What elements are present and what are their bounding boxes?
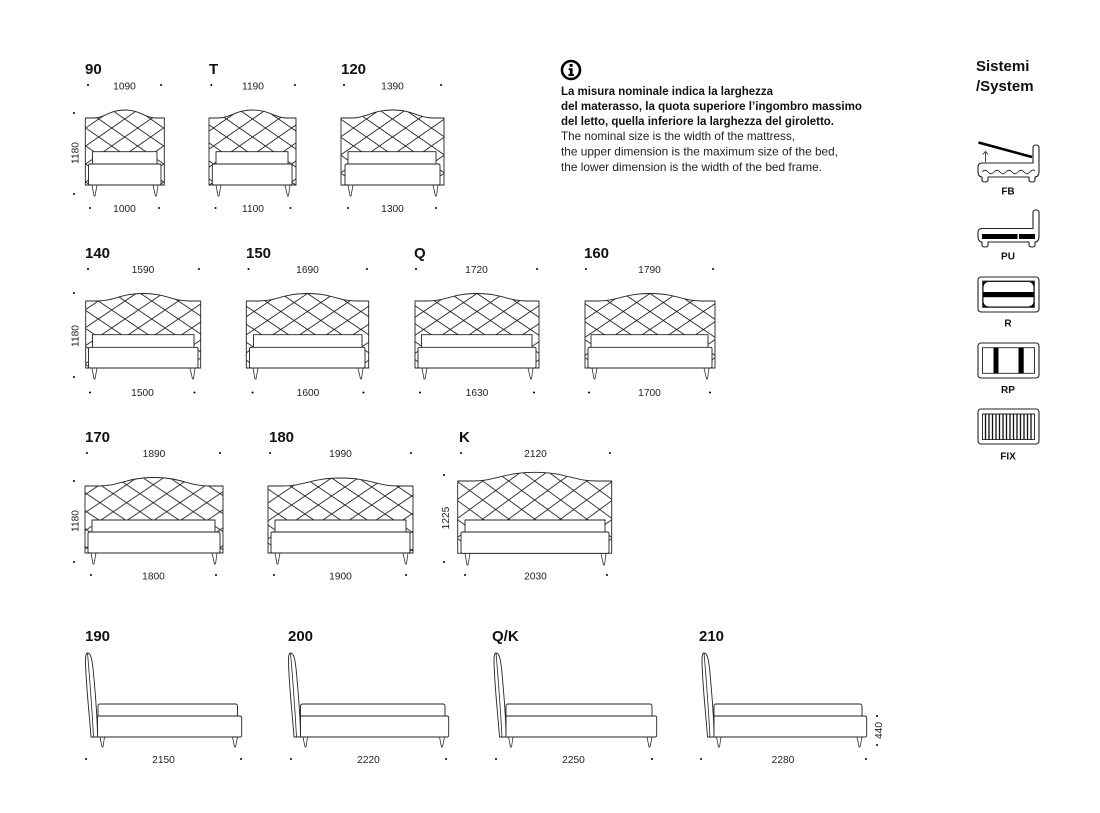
heading: 190: 190	[85, 628, 110, 645]
English note text: the lower dimension is the width of the bed frame.	[561, 160, 822, 174]
lower dimension 1300	[347, 204, 437, 215]
upper dimension 2120: 2120	[524, 449, 547, 460]
lower dimension 1600: 1600	[297, 388, 320, 399]
upper dimension 1890: 1890	[143, 449, 166, 460]
label FB: FB	[1001, 186, 1015, 198]
size 180 front view	[268, 429, 413, 582]
lower dimension 2220: 2220	[357, 755, 380, 766]
upper dimension 1720: 1720	[465, 265, 488, 276]
icon: info	[562, 61, 580, 79]
heading: 210: 210	[699, 628, 724, 645]
bed drawing	[341, 110, 444, 196]
label FIX: FIX	[1000, 452, 1016, 462]
lower dimension 1900: 1900	[329, 572, 352, 582]
size 140 front view	[70, 245, 201, 399]
systems panel	[976, 58, 1039, 462]
bed drawing	[85, 478, 223, 564]
size 90 front view	[70, 61, 164, 215]
size 210 side view	[699, 628, 885, 766]
lower dimension 1800	[90, 572, 217, 582]
English note text	[561, 129, 838, 174]
bed drawing	[585, 294, 715, 379]
heading: systems: Sistemi	[976, 58, 1029, 75]
lower dimension 2280: 2280	[772, 755, 795, 766]
upper dimension 1990: 1990	[329, 449, 352, 460]
heading: 200: 200	[288, 628, 313, 645]
icon: PU bed	[978, 210, 1039, 247]
size Q/K side view	[492, 628, 657, 766]
size 160 front view	[584, 245, 715, 399]
height dimension 1180: 1180	[70, 142, 82, 164]
upper dimension 1390: 1390	[381, 82, 404, 92]
heading: Q: Q	[414, 245, 426, 262]
bed drawing	[458, 472, 612, 565]
heading: 120: 120	[341, 61, 366, 78]
heading: systems	[976, 58, 1034, 95]
label R: R	[1004, 318, 1012, 330]
lower dimension 2250: 2250	[562, 755, 585, 766]
lower dimension 1800: 1800	[142, 572, 165, 582]
upper dimension 1190	[210, 82, 296, 92]
lower dimension 1500: 1500	[131, 388, 154, 399]
lower dimension 2150: 2150	[152, 755, 175, 766]
upper dimension 1590: 1590	[132, 265, 155, 276]
bed drawing	[415, 294, 539, 379]
bed drawing	[209, 110, 296, 196]
lower dimension 2030: 2030	[524, 572, 547, 582]
height dimension 1180	[70, 112, 82, 195]
bed side drawing	[288, 653, 449, 747]
upper dimension 1790	[585, 265, 714, 276]
lower dimension 1500	[89, 388, 196, 399]
size 190 side view	[85, 628, 242, 766]
height dimension 1180	[70, 480, 82, 563]
lower dimension 1700: 1700	[638, 388, 661, 399]
height dimension 440	[874, 715, 885, 746]
heading: 140: 140	[85, 245, 110, 262]
lower dimension 1700	[588, 388, 711, 399]
upper dimension 1390	[343, 82, 442, 92]
heading: T: T	[209, 61, 218, 78]
heading: 160: 160	[584, 245, 609, 262]
size K front view	[441, 429, 612, 582]
heading: 150: 150	[246, 245, 271, 262]
heading: K: K	[459, 429, 470, 446]
Italian note text: La misura nominale indica la larghezza	[561, 84, 773, 98]
height dimension 1180: 1180	[70, 325, 82, 347]
height dimension 1225	[441, 474, 452, 563]
Italian note text	[561, 84, 862, 128]
size Q front view	[414, 245, 539, 399]
lower dimension 1600	[252, 388, 364, 399]
heading: Q/K: Q/K	[492, 628, 519, 645]
height dimension 1180: 1180	[70, 510, 82, 532]
upper dimension 1590	[87, 265, 200, 276]
upper dimension 1190: 1190	[242, 82, 264, 92]
size 150 front view	[246, 245, 369, 399]
icon: R frame	[978, 277, 1039, 312]
English note text: The nominal size is the width of the mattress,	[561, 129, 795, 143]
heading: systems: /System	[976, 78, 1034, 95]
size T front view	[209, 61, 296, 215]
Italian note text: del materasso, la quota superiore l’ingombro massimo	[561, 99, 862, 113]
icon: FB storage bed	[978, 142, 1039, 182]
lower dimension 1000	[89, 204, 160, 215]
upper dimension 1090	[87, 82, 162, 92]
size 200 side view	[288, 628, 449, 766]
lower dimension 1100	[215, 204, 292, 215]
label RP: RP	[1001, 385, 1015, 396]
heading: 170: 170	[85, 429, 110, 446]
lower dimension 1100: 1100	[242, 204, 264, 215]
lower dimension 1630: 1630	[466, 388, 489, 399]
height dimension 1180	[70, 292, 82, 378]
info note	[561, 61, 862, 174]
label PU: PU	[1001, 252, 1015, 262]
upper dimension 1890	[86, 449, 221, 460]
bed drawing	[246, 294, 369, 379]
size 170 front view	[70, 429, 223, 582]
bed drawing	[86, 294, 201, 379]
bed side drawing	[702, 653, 867, 747]
upper dimension 1790: 1790	[638, 265, 661, 276]
Italian note text: del letto, quella inferiore la larghezza del giroletto.	[561, 114, 834, 128]
height dimension 1225: 1225	[441, 506, 452, 529]
upper dimension 1720	[415, 265, 538, 276]
icon: FIX frame	[978, 409, 1039, 444]
bed drawing	[268, 478, 413, 564]
heading: 90: 90	[85, 61, 102, 78]
upper dimension 1690: 1690	[296, 265, 319, 276]
bed side drawing	[86, 653, 242, 747]
lower dimension 1630	[419, 388, 535, 399]
bed drawing	[85, 110, 164, 196]
lower dimension 1900	[273, 572, 407, 582]
upper dimension 1090: 1090	[113, 82, 136, 92]
English note text: the upper dimension is the maximum size of the bed,	[561, 144, 838, 158]
icon: RP frame	[978, 343, 1039, 378]
lower dimension 1000: 1000	[113, 204, 136, 215]
upper dimension 1690	[248, 265, 368, 276]
lower dimension 1300: 1300	[381, 204, 404, 215]
height dimension 440: 440	[874, 722, 885, 739]
heading: 180: 180	[269, 429, 294, 446]
size 120 front view	[341, 61, 444, 215]
bed side drawing	[494, 653, 657, 747]
